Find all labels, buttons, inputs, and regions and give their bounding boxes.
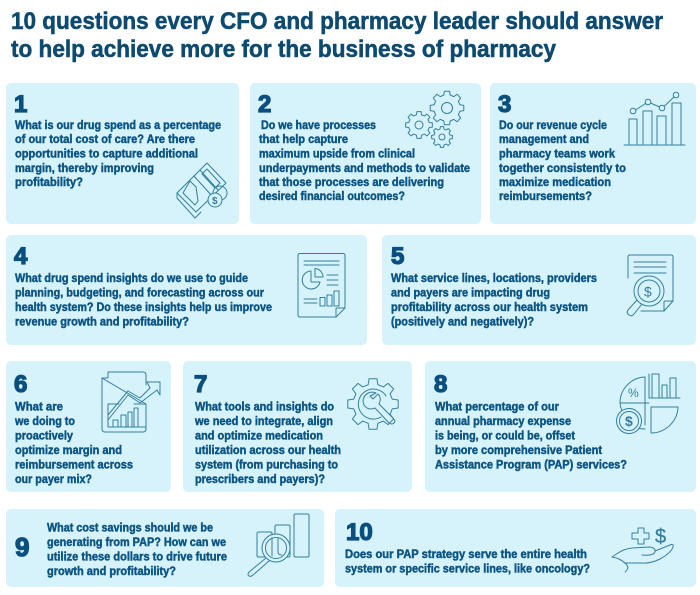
question 5 text: and payers are impacting drug	[391, 288, 550, 300]
question 8 text: is being, or could be, offset	[435, 430, 575, 442]
number 7: 7	[194, 371, 207, 398]
question 4 text	[15, 273, 272, 328]
question 8 text: annual pharmacy expense	[435, 416, 571, 428]
card background 6	[6, 361, 171, 492]
question 5 text: What service lines, locations, providers	[391, 273, 597, 285]
title: 10 questions every CFO and pharmacy leader should answer	[11, 8, 663, 35]
question 8 text: by more comprehensive Patient	[435, 445, 602, 457]
number 3: 3	[498, 91, 511, 118]
question 3 text: reimbursements?	[499, 191, 592, 203]
question 2 text: that those processes are delivering	[259, 177, 444, 189]
card background 4	[6, 235, 367, 345]
question 2 text: maximum upside from clinical	[259, 148, 415, 160]
panel: question 3	[490, 83, 696, 224]
question 1 text	[15, 120, 221, 189]
question 7 text	[194, 402, 341, 486]
question 7 text: and optimize medication	[195, 430, 323, 442]
panel: question 6	[6, 361, 171, 492]
icon: bars under magnifier	[248, 514, 309, 576]
question 6 text: optimize margin and	[15, 445, 122, 457]
card background 10	[335, 509, 696, 587]
question 4 text: planning, budgeting, and forecasting across our	[15, 288, 264, 300]
question 2 text: underpayments and methods to validate	[259, 163, 470, 175]
panel: question 5	[382, 235, 696, 345]
question 5 text: (positively and negatively)?	[391, 316, 534, 328]
question 7 text: prescribers and payers)?	[195, 474, 325, 486]
question 1 text: profitability?	[15, 177, 83, 189]
panel: question 10	[335, 509, 696, 587]
icon: growth chart document	[102, 372, 160, 432]
question 7 text: system (from purchasing to	[195, 460, 338, 472]
number 1: 1	[14, 91, 27, 118]
icon: gears	[406, 91, 464, 147]
icon: document with magnifier and dollar: $	[644, 284, 652, 300]
question 4 text: health system? Do these insights help us improve	[15, 302, 272, 314]
question 7 text: utilization across our health	[195, 445, 341, 457]
icon: pie, bars and dollar coin	[616, 374, 680, 434]
question 6 text: our payer mix?	[15, 474, 92, 486]
question 3 text: together consistently to	[499, 163, 626, 175]
card background 8	[425, 361, 696, 492]
number 8: 8	[434, 371, 447, 398]
question 3 text: management and	[499, 134, 589, 146]
question 2 text: that help capture	[259, 134, 348, 146]
question 9 text: utilize these dollars to drive future	[47, 552, 227, 564]
icon: document with magnifier and dollar	[627, 255, 673, 316]
number 10: 10	[346, 519, 373, 546]
question 4 text: What drug spend insights do we use to guide	[15, 273, 248, 285]
question 3 text: Do our revenue cycle	[499, 120, 607, 132]
icon: bar and line chart	[624, 92, 685, 145]
question 4 text: revenue growth and profitability?	[15, 316, 189, 328]
question 3 text: maximize medication	[499, 177, 611, 189]
question 2 text: desired financial outcomes?	[259, 191, 405, 203]
question 6 text: we doing to	[14, 416, 75, 428]
question 9 text: growth and profitability?	[47, 566, 176, 578]
panel: question 8	[425, 361, 696, 492]
number 6: 6	[14, 371, 27, 398]
icon: money and coin	[177, 163, 227, 218]
question 10 text: Does our PAP strategy serve the entire health	[345, 549, 587, 561]
question 8 text: Assistance Program (PAP) services?	[435, 460, 627, 472]
number 2: 2	[258, 91, 271, 118]
panel: question 9	[6, 509, 324, 587]
question 3 text: pharmacy teams work	[499, 148, 616, 160]
question 1 text: opportunities to capture additional	[15, 148, 198, 160]
icon: hand holding plus and dollar: $	[655, 526, 666, 548]
icon: pie, bars and dollar coin: $	[625, 413, 633, 429]
question 6 text: What are	[15, 402, 63, 414]
number 4: 4	[14, 243, 28, 270]
title: to help achieve more for the business of pharmacy	[11, 36, 557, 63]
question 6 text	[14, 402, 133, 486]
question 5 text: profitability across our health system	[391, 302, 588, 314]
card background 5	[382, 235, 696, 345]
card background 1	[6, 83, 239, 224]
question 8 text: What percentage of our	[435, 402, 559, 414]
question 3 text	[499, 120, 626, 203]
question 6 text: reimbursement across	[15, 460, 133, 472]
card background 7	[183, 361, 412, 492]
title	[11, 8, 663, 63]
question 8 text	[435, 402, 627, 472]
panel: question 7	[183, 361, 412, 492]
question 5 text	[391, 273, 597, 328]
number 9: 9	[15, 532, 29, 562]
question 10 text: system or specific service lines, like oncology?	[345, 564, 590, 576]
card background 2	[250, 83, 481, 224]
question 6 text: proactively	[15, 430, 74, 442]
question 9 text: What cost savings should we be	[47, 522, 213, 534]
icon: pie, bars and dollar coin: %	[628, 386, 639, 400]
number 5: 5	[391, 243, 404, 270]
panel: question 2	[250, 83, 481, 224]
panel: question 4	[6, 235, 367, 345]
question 7 text: we need to integrate, align	[194, 416, 333, 428]
question 9 text	[47, 522, 227, 578]
icon: gear with wrench	[348, 379, 398, 429]
question 2 text: Do we have processes	[261, 120, 376, 132]
question 1 text: What is our drug spend as a percentage	[15, 120, 221, 132]
card background 3	[490, 83, 696, 224]
panel: question 1	[6, 83, 239, 224]
icon: hand holding plus and dollar	[612, 526, 673, 572]
icon: money and coin: $	[212, 196, 218, 207]
question 9 text: generating from PAP? How can we	[47, 537, 226, 549]
icon: report document	[298, 254, 345, 317]
question 1 text: of our total cost of care? Are there	[15, 134, 195, 146]
question 10 text	[345, 549, 590, 576]
question 2 text	[259, 120, 470, 203]
card background 9	[6, 509, 324, 587]
question 7 text: What tools and insights do	[195, 402, 334, 414]
question 1 text: margin, thereby improving	[15, 163, 154, 175]
